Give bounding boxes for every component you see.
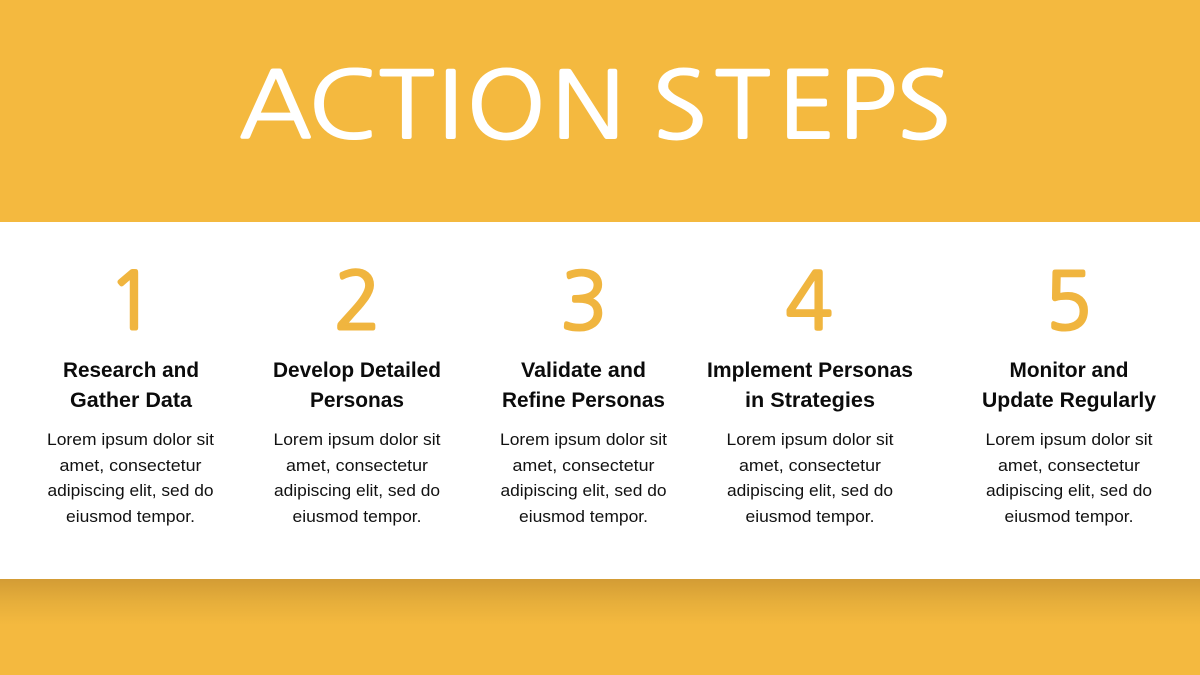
body text: eiusmod tempor. <box>519 507 648 526</box>
body text: adipiscing elit, sed do <box>727 481 893 500</box>
step 3 <box>500 263 667 526</box>
heading: Research and Gather Data: Research and <box>63 359 199 382</box>
step 5 <box>982 263 1156 526</box>
footer band <box>0 579 1200 675</box>
heading: Monitor and Update Regularly: Update Regularly <box>982 389 1156 412</box>
body text <box>986 430 1153 526</box>
heading: Develop Detailed Personas <box>273 359 441 412</box>
heading: Monitor and Update Regularly <box>982 359 1156 412</box>
body text: Lorem ipsum dolor sit <box>500 430 667 449</box>
body text: eiusmod tempor. <box>1004 507 1134 526</box>
title: ACTION STEPS <box>239 55 951 151</box>
heading: Research and Gather Data: Gather Data <box>70 389 192 412</box>
body text: adipiscing elit, sed do <box>274 481 440 500</box>
body text: amet, consectetur <box>60 456 202 475</box>
heading: Validate and Refine Personas <box>502 359 665 412</box>
number 3: 3 <box>560 263 608 341</box>
heading: Implement Personas in Strategies: Implement Personas <box>707 359 913 382</box>
heading: Monitor and Update Regularly: Monitor and <box>1010 359 1128 382</box>
heading: Implement Personas in Strategies: in Strategies <box>745 389 875 412</box>
body text: eiusmod tempor. <box>66 507 195 526</box>
heading: Implement Personas in Strategies <box>707 359 913 412</box>
step 1 <box>47 263 214 526</box>
body text: amet, consectetur <box>998 456 1140 475</box>
number 5: 5 <box>1045 263 1092 341</box>
body text <box>500 430 667 526</box>
number 4: 4 <box>785 263 833 341</box>
body text: adipiscing elit, sed do <box>986 481 1152 500</box>
heading: Develop Detailed Personas: Personas <box>310 389 404 412</box>
number 2: 2 <box>334 263 381 341</box>
body text: amet, consectetur <box>286 456 428 475</box>
heading: Research and Gather Data <box>63 359 199 412</box>
step 2 <box>273 263 441 526</box>
body text: eiusmod tempor. <box>292 507 422 526</box>
body text: adipiscing elit, sed do <box>48 481 214 500</box>
step 4 <box>707 263 913 526</box>
body text: Lorem ipsum dolor sit <box>274 430 441 449</box>
body text <box>726 430 894 526</box>
body text: adipiscing elit, sed do <box>500 481 666 500</box>
heading: Develop Detailed Personas: Develop Detailed <box>273 359 441 382</box>
body text: Lorem ipsum dolor sit <box>986 430 1153 449</box>
body text: amet, consectetur <box>739 456 881 475</box>
body text: amet, consectetur <box>512 456 655 475</box>
body text <box>274 430 441 526</box>
body text: Lorem ipsum dolor sit <box>47 430 214 449</box>
body text: eiusmod tempor. <box>746 507 874 526</box>
body text <box>47 430 214 526</box>
heading: Validate and Refine Personas: Validate and <box>521 359 646 382</box>
header band <box>0 0 1200 222</box>
heading: Validate and Refine Personas: Refine Personas <box>502 389 665 412</box>
number 1: 1 <box>108 263 155 341</box>
body text: Lorem ipsum dolor sit <box>726 430 894 449</box>
